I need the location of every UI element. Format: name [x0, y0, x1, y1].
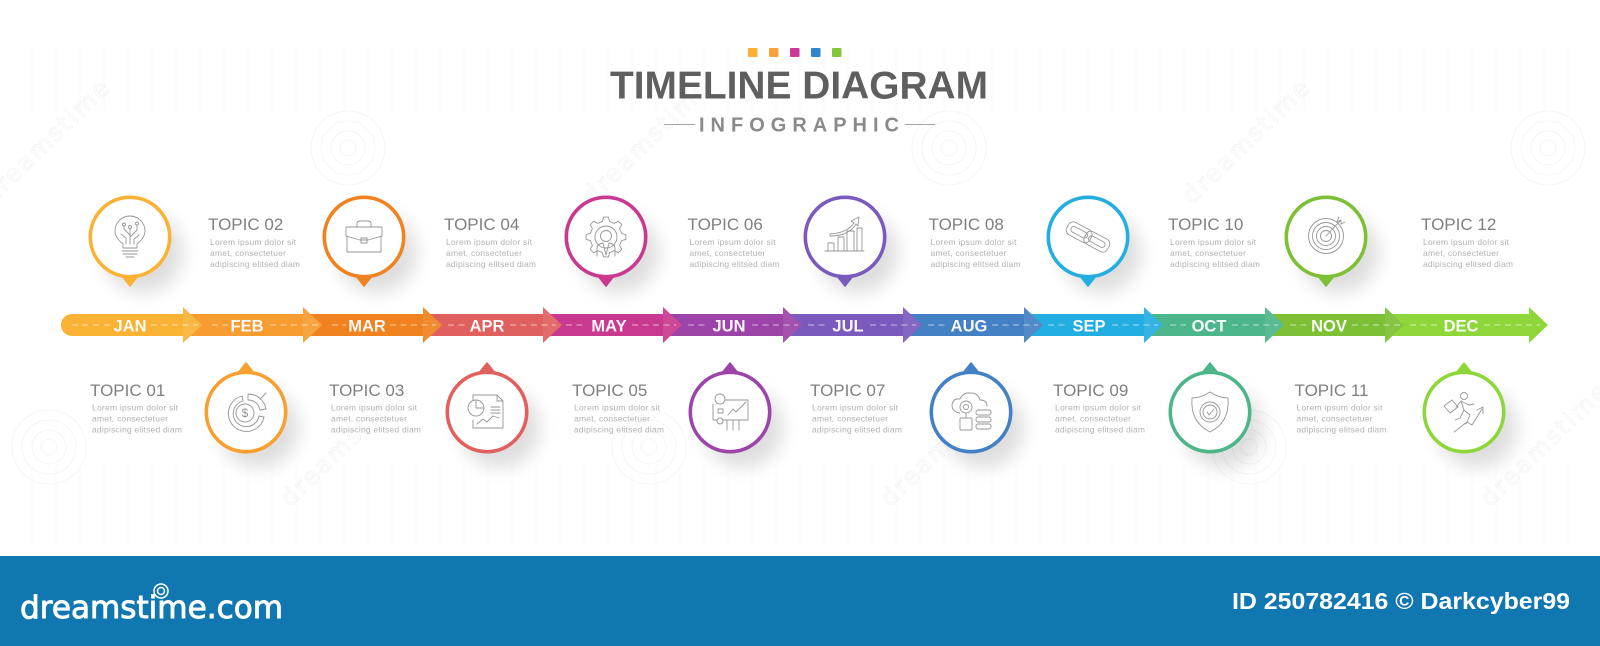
month labels: JAN: [113, 318, 147, 336]
topic 07: adipiscing elitsed diam: [812, 424, 902, 434]
topic 10: amet, consectetuer: [1170, 248, 1246, 258]
watermark: dreamstime: [1177, 75, 1315, 209]
topic 09: adipiscing elitsed diam: [1055, 424, 1145, 434]
segment: AUG: [900, 307, 1043, 343]
pin: JAN: [90, 197, 183, 293]
topic 11: TOPIC 11: [1294, 381, 1369, 400]
pin: JUL: [805, 197, 898, 293]
pin: FEB: [206, 362, 299, 468]
watermark: [0, 75, 1600, 512]
topic 08: TOPIC 08: [928, 215, 1004, 234]
month labels: MAY: [591, 318, 627, 336]
pin: MAR: [324, 197, 417, 293]
topic 08: adipiscing elitsed diam: [930, 259, 1020, 269]
pin: OCT: [1170, 362, 1263, 468]
segment: MAR: [300, 307, 442, 343]
topic 05: TOPIC 05: [572, 381, 647, 400]
topic 09: Lorem ipsum dolor sit: [1055, 402, 1142, 412]
pin: APR: [447, 362, 540, 468]
topic 12: TOPIC 12: [1421, 215, 1496, 234]
segment: JUN: [660, 307, 802, 343]
segment: SEP: [1020, 307, 1163, 343]
icon: bar chart with arrow: [825, 217, 864, 251]
topic 06: adipiscing elitsed diam: [690, 259, 780, 269]
month labels: JUL: [832, 318, 864, 336]
topic 04: amet, consectetuer: [446, 248, 522, 258]
pin: AUG: [931, 362, 1024, 468]
colour squares: [748, 48, 842, 57]
topic 04: Lorem ipsum dolor sit: [446, 237, 533, 247]
topic 03: [329, 381, 421, 434]
topic 11: amet, consectetuer: [1296, 414, 1373, 424]
topic 10: Lorem ipsum dolor sit: [1170, 237, 1257, 247]
topic 03: Lorem ipsum dolor sit: [331, 402, 418, 412]
topic 07: Lorem ipsum dolor sit: [812, 402, 899, 412]
topic 08: Lorem ipsum dolor sit: [930, 237, 1017, 247]
topic 01: adipiscing elitsed diam: [92, 424, 182, 434]
month labels: SEP: [1072, 318, 1106, 336]
topic 04: adipiscing elitsed diam: [446, 259, 536, 269]
month labels: NOV: [1311, 318, 1347, 336]
topic 08: amet, consectetuer: [930, 248, 1007, 258]
month labels: OCT: [1192, 318, 1226, 336]
segment: DEC: [1380, 307, 1548, 343]
topic 07: TOPIC 07: [810, 381, 885, 400]
topic 04: TOPIC 04: [444, 215, 519, 234]
icon: running businessman: [1444, 392, 1483, 432]
topic 02: TOPIC 02: [208, 215, 283, 234]
topic 04: [444, 215, 536, 269]
segment: OCT: [1140, 307, 1284, 343]
segment: JUL: [780, 307, 922, 343]
icon: target: [1308, 217, 1345, 254]
icon: report document: [468, 395, 503, 428]
topic 03: adipiscing elitsed diam: [331, 424, 421, 434]
topic 03: amet, consectetuer: [331, 414, 407, 424]
watermark: dreamstime: [275, 378, 413, 512]
topic 10: TOPIC 10: [1168, 215, 1243, 234]
topic 10: [1168, 215, 1260, 269]
pin: MAY: [566, 197, 659, 293]
month labels: MAR: [348, 318, 386, 336]
topic 12: Lorem ipsum dolor sit: [1423, 237, 1510, 247]
month labels: JUN: [712, 318, 746, 336]
segment: NOV: [1260, 307, 1404, 343]
topic 12: [1421, 215, 1513, 269]
topic 11: adipiscing elitsed diam: [1296, 424, 1386, 434]
topic 01: [90, 381, 182, 434]
watermark: dreamstime: [577, 75, 715, 209]
segment: FEB: [180, 307, 322, 343]
month labels: AUG: [951, 318, 987, 336]
icon: shield: [1192, 392, 1228, 432]
icon: light bulb: [115, 216, 145, 257]
watermark: dreamstime: [875, 378, 1013, 512]
topic 02: amet, consectetuer: [210, 248, 286, 258]
pin: JUN: [690, 362, 783, 468]
topic 07: [810, 381, 902, 434]
topic 06: amet, consectetuer: [690, 248, 766, 258]
icon: presentation board: [713, 394, 748, 430]
topic 02: Lorem ipsum dolor sit: [210, 237, 297, 247]
footer bar: [0, 556, 1600, 646]
topic 09: TOPIC 09: [1053, 381, 1128, 400]
topic 05: adipiscing elitsed diam: [574, 424, 664, 434]
segment: JAN: [61, 307, 202, 343]
icon: dollar chart: $: [242, 406, 249, 420]
topic 12: amet, consectetuer: [1423, 248, 1499, 258]
topic 01: TOPIC 01: [90, 381, 165, 400]
topic 11: Lorem ipsum dolor sit: [1296, 402, 1383, 412]
month labels: DEC: [1444, 318, 1478, 336]
topic 01: amet, consectetuer: [92, 414, 168, 424]
topic 09: [1053, 381, 1145, 434]
month labels: FEB: [230, 318, 264, 336]
footer logo: dreamstime.com: [20, 590, 283, 626]
topic 03: TOPIC 03: [329, 381, 404, 400]
icon: cloud and database: [952, 393, 991, 430]
topic 11: [1294, 381, 1386, 434]
topic 07: amet, consectetuer: [812, 414, 888, 424]
title: TIMELINE DIAGRAM: [610, 64, 988, 108]
topic 12: adipiscing elitsed diam: [1423, 259, 1513, 269]
topic 06: [688, 215, 780, 269]
icon: briefcase: [346, 221, 382, 252]
topic 10: adipiscing elitsed diam: [1170, 259, 1260, 269]
topic 05: Lorem ipsum dolor sit: [574, 402, 661, 412]
icon: gear with person: [586, 217, 626, 257]
month labels: [113, 318, 1478, 336]
topic 08: [928, 215, 1020, 269]
topic 05: [572, 381, 664, 434]
pin: SEP: [1048, 197, 1141, 293]
topic 06: TOPIC 06: [688, 215, 763, 234]
subtitle: INFOGRAPHIC: [699, 114, 899, 136]
footer credit: ID 250782416 © Darkcyber99: [1232, 588, 1570, 614]
topic 09: amet, consectetuer: [1055, 414, 1131, 424]
topic 02: [208, 215, 300, 269]
timeline arrow bar: [61, 307, 1548, 343]
topic 01: Lorem ipsum dolor sit: [92, 402, 179, 412]
month labels: APR: [470, 318, 504, 336]
title block: [610, 48, 988, 136]
topic 06: Lorem ipsum dolor sit: [690, 237, 776, 247]
segment: MAY: [540, 307, 682, 343]
topic 05: amet, consectetuer: [574, 414, 650, 424]
icon: broken chain: [1064, 220, 1112, 254]
pin: DEC: [1424, 362, 1517, 468]
pin: NOV: [1286, 197, 1379, 293]
segment: APR: [420, 307, 562, 343]
topic 02: adipiscing elitsed diam: [210, 259, 300, 269]
